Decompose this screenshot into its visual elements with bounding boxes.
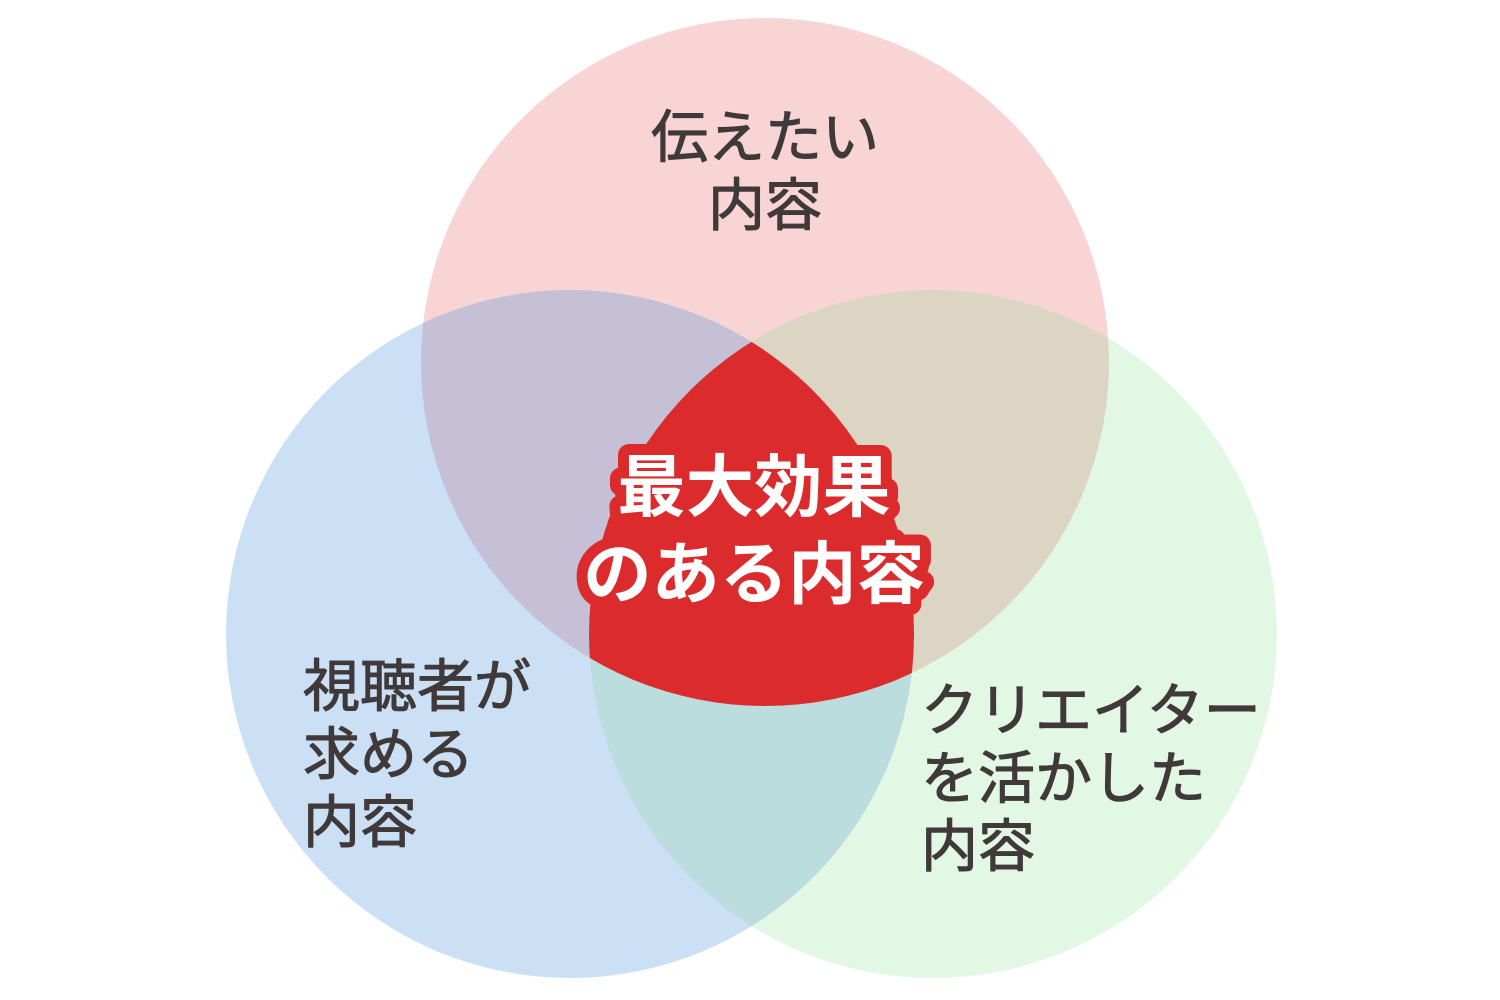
circle: right xyxy=(589,290,1277,978)
overlap: top and right xyxy=(752,290,1109,673)
circle: top xyxy=(421,18,1109,706)
overlap: centre of all three xyxy=(589,342,914,706)
label: left circle: 内容 xyxy=(303,791,417,855)
label: right circle: 内容 xyxy=(921,815,1035,879)
circle: left xyxy=(226,290,914,978)
label: left circle: 視聴者が xyxy=(303,655,531,719)
overlap: top and left xyxy=(421,290,752,658)
label: right circle: クリエイター xyxy=(921,679,1261,743)
label: right circle: を活かした xyxy=(921,747,1206,811)
centre label: のある内容 xyxy=(583,537,925,613)
label: top circle: 伝えたい xyxy=(651,106,879,170)
label: left circle: 求める xyxy=(303,723,474,787)
venn diagram xyxy=(226,18,1277,978)
label: top circle: 内容 xyxy=(708,174,822,238)
centre label: 最大効果 xyxy=(617,450,891,526)
overlap: left and right xyxy=(590,344,914,926)
